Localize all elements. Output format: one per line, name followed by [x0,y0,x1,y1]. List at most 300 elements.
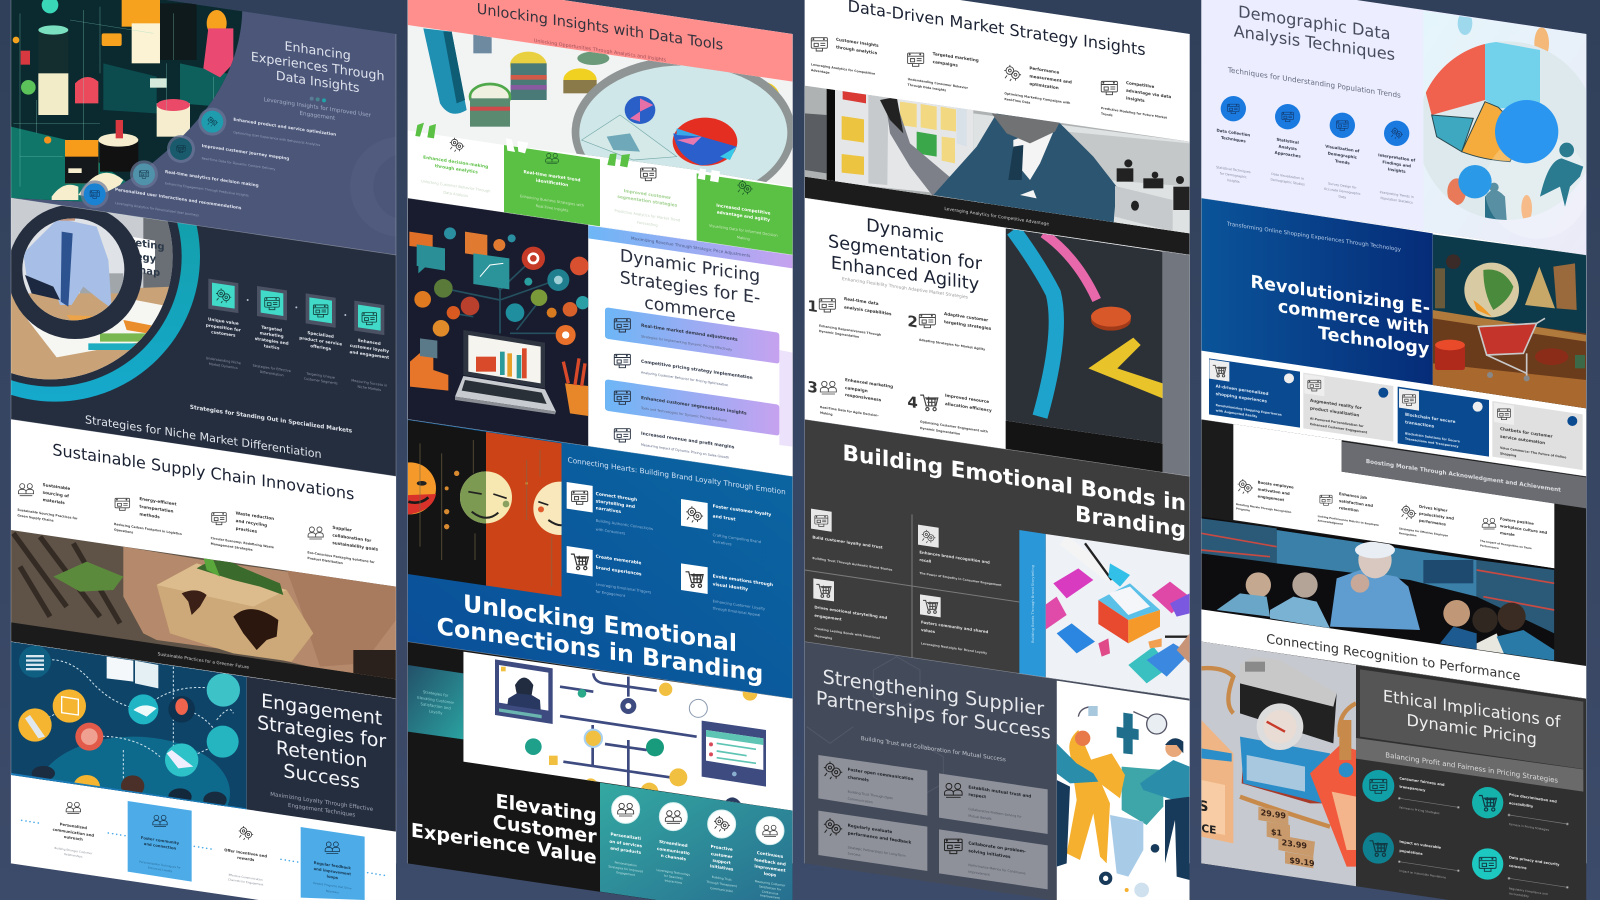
panel: Strengthening Supplier Partnerships for Success [800,620,1233,900]
image: emotion faces [384,417,587,603]
card descriptions: Forecasting [637,220,658,228]
row text: Measuring Impact of Dynamic Pricing on Sales Growth [641,443,729,460]
right title block [247,677,396,832]
item descriptions: Fairness in Pricing Strategies [1399,805,1440,815]
side text [417,689,455,715]
item labels: Real-time data [844,296,879,306]
card icons [66,802,340,853]
image: camera and price tags: 29.99 [1261,808,1286,821]
panel: Unlocking Insights with Data Tools [408,0,793,255]
item labels: transportation [139,504,173,514]
column descriptions: Data [1339,194,1346,200]
item labels: and recycling [236,518,267,528]
grey banner [1342,442,1586,508]
card text: with Augmented Reality [1216,408,1257,418]
row text: Strategies for Implementing Dynamic Pricing Effectively [641,334,732,352]
title: Segmentation for [828,232,983,275]
column labels: Data Collection [1216,128,1250,138]
row text: Tools and Technologies for Dynamic Pricing Solutions [640,406,727,423]
title [828,216,983,295]
item labels [844,296,992,413]
square icons [571,491,703,587]
side text: Strategies for [423,689,449,698]
image: laptop network [400,187,600,453]
item descriptions: Trends [1101,112,1113,117]
card labels: Offer incentives and [224,847,267,859]
list items: Enhanced product and service optimization [233,117,336,137]
item descriptions: Linking Performance Metrics to Employee [1318,514,1379,527]
column descriptions: Insights [1227,178,1240,184]
card descriptions: Mutual Benefit [968,814,992,821]
numbers: 2 [907,312,918,332]
item labels: motivation and [1258,486,1290,496]
title: Enhanced Agility [831,253,979,295]
column labels: Insights [1388,166,1406,174]
item labels: marketing [260,330,284,339]
item labels: workplace culture and [1500,523,1547,535]
card text: Establish mutual trust and [968,784,1031,799]
grid lines [805,514,1019,657]
title [257,689,386,793]
card text: Blockchain for secure [1405,412,1456,424]
card descriptions: Relationships [64,852,83,859]
column descriptions: Leveraging Technology [657,868,690,877]
teal circles [1362,770,1503,880]
row text: Enhanced customer segmentation insights [641,395,747,417]
column descriptions: Measuring Customer [755,879,786,888]
card labels [53,821,351,880]
item labels: product or service [299,335,342,347]
item labels: Adaptive customer [944,311,989,323]
numbers: 1 [807,297,818,316]
column descriptions: Interactions [665,878,682,885]
column labels: Interpretation of [1378,152,1415,163]
title [411,789,597,869]
column descriptions: Personalization [615,860,637,868]
caption band [805,177,1190,255]
column descriptions: Engagement [616,870,636,877]
title: Unlocking Emotional [463,589,737,658]
tile icons [1213,365,1511,420]
card labels: Real-time market trend [523,169,581,184]
item labels: Enhanced [358,338,381,346]
cell text [812,534,1002,655]
title: Success [283,759,360,793]
card arrows [1284,373,1577,426]
item descriptions: Accountability [1509,891,1529,898]
image: photo circle: Roadmap [107,260,160,279]
item labels: Targeted marketing [933,51,979,63]
column labels: Proactive [711,844,733,852]
item labels: materials [43,497,65,505]
column descriptions: Population Statistics [1381,196,1413,205]
item descriptions [206,356,387,392]
dark ring [8,204,142,339]
subtitle: Enhancing Flexibility Through Adaptive Market Strategies [842,276,969,301]
item descriptions: Crafting Compelling Brand [713,533,761,544]
column labels [1216,128,1415,174]
black strip [1006,421,1163,472]
column descriptions: Interpreting Trends in [1380,190,1414,199]
item descriptions: Management Strategies [211,542,253,552]
card labels: loops [327,874,339,880]
title: Dynamic [866,216,944,247]
item descriptions [811,62,1168,120]
image: camera and price tags: $1 [1271,827,1283,838]
cell text: Enhances brand recognition and [919,549,990,565]
column labels: improvement [754,863,786,873]
cards [408,131,793,255]
card text: Blockchain Solutions for Secure [1405,431,1460,443]
item labels: practices [236,526,258,534]
column labels: Personalizati [610,831,641,841]
cell icon tiles [811,509,941,617]
item labels: sustainability goals [332,540,379,552]
list items: Optimizing User Experience with Behavioral Analytics [233,130,320,147]
column labels: Trends [1335,158,1350,166]
numbers: 4 [907,393,918,412]
item descriptions: with Consumers [596,527,625,536]
image: demographic pie [1417,7,1596,260]
item descriptions: Sustainable Sourcing Practices for [17,508,78,521]
panel: Data-Driven Market Strategy Insights [800,0,1233,300]
item labels: accessibility [1509,801,1534,809]
item labels: Competitive [1126,80,1154,89]
column labels: Findings and [1382,159,1411,168]
cell text: The Power of Empathy in Consumer Engagement [919,571,1002,587]
column labels: support [713,858,731,865]
side shade [779,350,793,447]
item labels: concerns [1509,864,1527,870]
item labels: and trust [713,513,735,523]
title: Strategies for Niche Market Differentiation [85,413,322,461]
title: Technology [1318,324,1430,360]
card descriptions: Making [737,235,750,241]
item descriptions: Measuring Success in [351,378,387,388]
item labels: Energy-efficient [139,496,176,506]
image: hands holding kraft box [11,530,396,680]
panel: Unlocking Emotional Connections in Branding [384,387,833,720]
dots [310,97,326,102]
title: Retention [276,736,367,772]
card descriptions: Unlocking Customer Behavior Through [421,179,490,193]
item labels: offerings [310,343,332,351]
image: e-commerce still life [1430,230,1590,413]
item labels: measurement and [1029,73,1072,85]
column descriptions: Building Trust [712,875,732,882]
item labels: Supplier [332,525,353,533]
item labels: Evoke emotions through [713,573,773,588]
cell text: Fosters community and shared [921,619,988,634]
card descriptions: Success [848,851,861,857]
cell text: Building Trust Through Authentic Brand Stories [812,556,892,572]
item descriptions: Circular Economy: Redefining Waste [211,536,274,549]
card descriptions: Personalization Techniques for [139,860,181,870]
card descriptions [54,846,352,895]
image: engagement network [11,642,247,810]
card labels: Personalized [60,821,87,830]
item descriptions: Targeting Unique [306,371,335,380]
card descriptions [421,179,778,241]
item labels: Specialized [307,330,334,339]
title: Strengthening Supplier [823,665,1044,721]
card labels: identification [536,178,568,188]
item labels [206,316,389,360]
side text: Elevating Customer [417,695,455,705]
image: analytics tools and magnifier [408,25,792,186]
column descriptions: Strategies for Improved [608,864,643,874]
banner text: Boosting Morale Through Acknowledgment and Achievement [1366,459,1561,494]
column descriptions [1216,165,1414,205]
item descriptions: Recognition [1399,531,1417,538]
item descriptions: Leveraging Analytics for Competitive [811,62,875,76]
list items [115,117,336,217]
item labels: Foster customer loyalty [713,503,771,518]
item descriptions: Reducing Carbon Footprint in Logistics [114,522,182,536]
card labels: Foster community [141,835,180,846]
item descriptions: Adapting Strategies for Market Agility [919,338,985,351]
card text: transactions [1405,419,1435,429]
item descriptions: Strategies for Effective Employee [1399,526,1448,538]
item descriptions: Building Authentic Connections [596,519,653,531]
item icons [18,484,323,539]
item descriptions: Advantage [811,68,830,75]
card labels: and connection [144,841,177,851]
title: Strategies for [257,711,386,753]
card labels: Improved customer [624,188,672,201]
image: camera and price tags: 23.99 [1282,838,1307,851]
card descriptions: Data Analysis [443,191,468,198]
column descriptions [608,860,786,900]
list items: Real-time analytics for decision making [165,169,259,188]
column descriptions: Improvement [760,893,781,900]
item descriptions: Impact on Vulnerable Populations [1399,869,1446,880]
card descriptions: Predictive Analytics for Market Trend [614,209,680,223]
column labels: customer [711,851,734,859]
header: Connecting Hearts: Building Brand Loyalty Through Emotion [568,455,786,496]
cell text: recall [919,557,931,564]
item descriptions: for Engagement [596,590,626,598]
item descriptions: Real-Time Data for Agile Decision- [820,405,879,418]
item descriptions: Performance [1480,543,1499,550]
item descriptions: Optimizing Marketing Campaigns with [1004,91,1070,105]
column labels: and products [610,845,642,855]
title panel [1360,669,1583,769]
blue header [1201,198,1433,385]
card descriptions: Channels for Engagement [228,877,263,887]
item labels: methods [139,511,160,519]
item descriptions: Leveraging Emotional Triggers [596,582,651,595]
panel: Revolutionizing E-commerce with Technology [1190,167,1600,500]
cell text: Creating Lasting Bonds with Emotional [814,626,880,640]
item descriptions: The Impact of Recognition on Team [1480,539,1532,550]
card descriptions: Building Stronger Customer [54,846,93,856]
item descriptions: Green Supply Chains [17,513,54,523]
title [252,41,384,92]
card descriptions: Real-Time Insights [536,204,568,213]
gradient band [588,225,793,268]
item labels: Customer insights [836,37,879,48]
item descriptions: Through Data Insights [908,83,946,92]
card labels [423,155,770,223]
card text [848,767,1031,859]
row text: Analyzing Customer Behavior for Pricing Optimization [641,370,728,387]
cell text: Messaging [814,634,832,640]
item descriptions: Real-Time Data [1004,97,1030,105]
card text: product visualization [1310,405,1359,418]
right grey strip [1163,250,1190,476]
item descriptions: Product Distribution [307,556,343,565]
column labels: Visualization of [1325,143,1360,154]
image: businessman at board [800,80,1200,240]
circle icons [1221,96,1409,146]
column labels: on of services [609,839,642,848]
image: camera and price tags [1197,637,1360,893]
item labels: Sustainable [43,482,70,491]
item labels: targeting strategies [944,319,992,331]
column labels: Streamlined [659,839,688,848]
card text: solving initiatives [968,848,1011,859]
item descriptions: Operations [114,528,133,535]
title: Sustainable Supply Chain Innovations [52,440,354,504]
row text [640,323,753,460]
connector lines [1398,797,1568,888]
card text: Shopping [1500,451,1516,458]
card labels: and improvement [314,866,351,876]
item labels: storytelling and [596,498,635,510]
panel: Demographic Data Analysis Techniques [1190,0,1600,300]
card labels: rewards [237,855,255,862]
title: Dynamic Pricing [620,246,760,287]
title: commerce with [1278,297,1429,339]
column labels: Analysis [1278,144,1297,151]
teal side block [408,665,463,739]
tile icons [815,516,938,613]
item labels: Targeted [261,324,282,333]
item labels: insights [1126,95,1145,103]
item labels: advantage via data [1126,88,1171,99]
item labels: visual identity [713,581,748,593]
item labels: Performance [1029,65,1059,75]
circle icons [1370,779,1496,871]
numbers: 3 [807,378,818,397]
title band [408,0,793,82]
panel: Ethical Implications of Dynamic Pricing [1190,620,1600,900]
item labels: responsiveness [845,392,882,402]
item labels: through analytics [836,44,878,55]
image: colorful brand box [1043,530,1193,703]
bottom band [1201,609,1586,699]
panel: Building Emotional Bonds in Branding [800,387,1233,720]
item descriptions: Boosting Morale Through Recognition [1236,502,1291,514]
panel: Connecting Recognition to Performance [1190,387,1600,720]
column descriptions: Satisfaction for [759,884,782,892]
item descriptions: Enhancing Responsiveness Through [819,324,881,337]
subtitle: Unlocking Opportunities Through Analytics and Insights [534,38,667,64]
card descriptions: Effective Communication [229,873,263,882]
item descriptions: Acknowledgment [1318,518,1344,526]
header text: Transforming Online Shopping Experiences Through Technology [1226,221,1402,253]
item labels: narratives [596,505,621,515]
subtitle: Strategies for Standing Out in Specialized Markets [190,405,353,435]
item descriptions: Niche Markets [358,385,381,392]
card text: Foster open communication [848,767,913,781]
title [1251,273,1430,360]
item labels: campaigns [933,59,958,68]
blue strip [1019,530,1046,677]
item labels: strategies and [255,336,289,346]
icons along the arc [81,108,226,208]
blue cards [128,801,365,900]
item labels: campaign [845,385,868,393]
item labels: satisfaction and [1339,498,1373,508]
item labels: engagement [1258,493,1284,502]
card text: Revolutionizing Shopping Experiences [1216,403,1282,417]
title: Ethical Implications of [1383,686,1561,731]
subtitle: Maximizing Loyalty Through Effective [270,792,374,813]
column labels: Techniques [1221,135,1246,144]
item labels: Impact on vulnerable [1399,840,1442,850]
item labels: proposition for [206,322,242,333]
item descriptions: Enhancing Customer Loyalty [713,599,766,611]
column labels [609,831,786,878]
list items: Real-Time Data for Dynamic Content Delivery [202,156,275,171]
item labels: Price discrimination and [1509,793,1557,804]
item labels: populations [1399,849,1423,856]
item labels: morale [1500,530,1515,537]
column labels: Approaches [1275,150,1301,159]
item labels: Enhances job [1339,491,1367,500]
subtitle: Engagement [299,111,336,122]
panel: Elevating Customer Experience Value [400,620,833,900]
column labels: Statistical [1276,137,1300,145]
image: data towers [11,0,242,202]
item descriptions: Customer Segments [304,377,338,386]
item icons [1238,479,1496,529]
image: team around hologram [1197,513,1560,667]
title: Building Emotional Bonds in [843,441,1186,517]
row text: Increased revenue and profit margins [641,431,735,451]
item descriptions: Understanding Consumer Behavior [908,77,968,90]
column descriptions: Communication [710,886,733,893]
card descriptions: Building Trust Through Open [848,790,893,800]
card text [1216,383,1566,459]
list items: Personalized user interactions and recommendations [115,187,242,210]
card descriptions: Enhanced Loyalty [148,866,172,873]
card descriptions: Enhancing Business Strategies with [520,194,584,208]
row text: Competitive pricing strategy implementation [641,359,753,381]
item descriptions: Eco-Conscious Packaging Solutions for [307,550,375,564]
card text: performance and feedback [848,830,911,845]
teal ring [11,198,200,402]
item descriptions: Programs [1236,506,1251,512]
card descriptions: Improvement [968,870,991,877]
dotted connectors [21,819,385,876]
card labels: through analytics [435,163,478,176]
item labels: Data privacy and security [1509,855,1560,867]
card descriptions: Reward Programs that Drive [313,881,352,891]
title: Partnerships for Success [816,686,1051,744]
caption band [11,620,396,699]
image: camera and price tags: S [1198,798,1208,815]
item labels: transparency [1399,785,1426,793]
item descriptions [819,324,988,436]
item labels: Connect through [596,491,637,503]
card text: shopping experiences [1216,391,1267,404]
card descriptions: Collaborative Problem-Solving for [968,807,1022,819]
column descriptions: Survey Design for [1328,182,1357,190]
title: Enhancing [285,39,351,64]
